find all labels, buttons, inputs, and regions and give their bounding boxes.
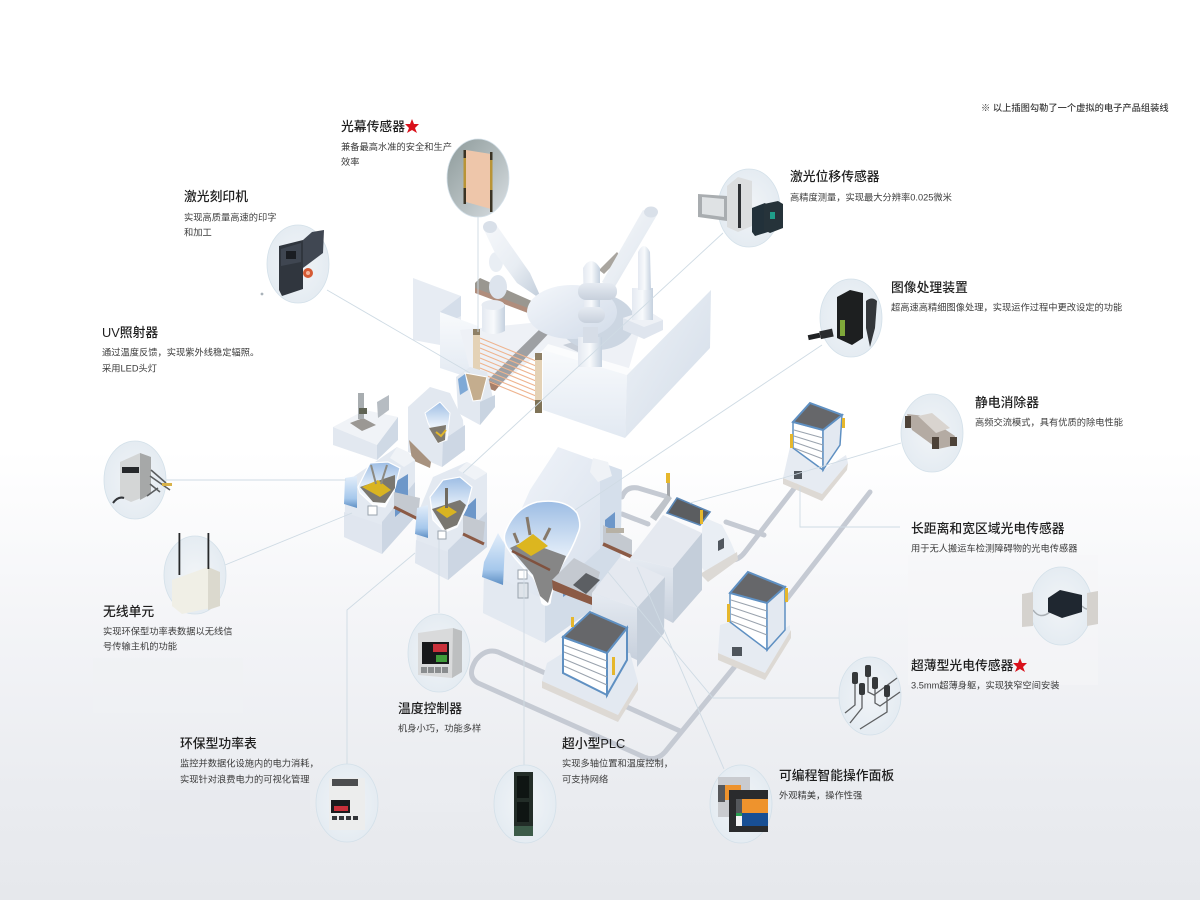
description: 效率: [341, 156, 360, 167]
heading: 静电消除器: [975, 395, 1039, 410]
heading: 可编程智能操作面板: [779, 768, 894, 783]
heading: 超薄型光电传感器: [911, 658, 1014, 673]
product bubble: [1022, 567, 1098, 645]
heading: 温度控制器: [398, 701, 462, 716]
callout: UV irradiator: [102, 325, 259, 519]
conveyors in robot cell: [475, 252, 621, 391]
block front: [592, 557, 665, 667]
product bubble: [267, 225, 329, 303]
heading: 激光位移传感器: [790, 169, 880, 184]
heading: 光幕传感器: [341, 119, 405, 134]
machine 2: [408, 387, 465, 468]
block back: [630, 495, 703, 623]
product bubble: [447, 139, 509, 217]
robot: left: [482, 221, 542, 334]
assembly line illustration: [333, 206, 870, 759]
callout: image processing device: [808, 279, 1122, 357]
heading: 无线单元: [103, 604, 154, 619]
description: 采用LED头灯: [102, 364, 157, 374]
callout: ultra-thin photoelectric sensor: [839, 657, 1060, 735]
heading: 环保型功率表: [180, 736, 257, 751]
callout: eco power meter: [180, 736, 378, 842]
heading: 长距离和宽区域光电传感器: [911, 521, 1065, 536]
product bubble: [408, 614, 470, 692]
product bubble: [104, 441, 172, 519]
light curtain: [473, 329, 542, 413]
heading: 图像处理装置: [891, 280, 968, 295]
description: 实现高质量高速的印字: [184, 212, 276, 222]
AGV front: [542, 612, 638, 722]
description: 和加工: [184, 228, 212, 238]
robot: right: [623, 246, 663, 339]
callout: laser marker: [184, 189, 329, 303]
robot: center: [578, 206, 658, 323]
product bubble: [808, 279, 882, 357]
description: 高频交流模式，具有优质的除电性能: [975, 416, 1123, 428]
leader lines: [166, 217, 901, 769]
callout: static eliminator: [901, 394, 1123, 472]
callout: long range photoelectric sensor: [911, 521, 1098, 645]
description: 高精度测量，实现最大分辨率0.025微米: [790, 192, 952, 202]
product bubble: [494, 765, 556, 843]
description: 实现环保型功率表数据以无线信: [103, 626, 232, 636]
description: 可支持网络: [562, 774, 608, 784]
description: 实现多轴位置和温度控制，: [562, 758, 673, 768]
AGV behind block: [666, 473, 738, 582]
icon: red star: [1013, 658, 1027, 672]
heading: 激光刻印机: [184, 189, 248, 204]
AGV right: [718, 572, 791, 680]
inspection stage: [333, 393, 398, 460]
callout: light curtain sensor: [341, 119, 509, 217]
conveyor between machines 4 and 5: [463, 515, 485, 544]
conveyor between machines 3 and 4: [394, 492, 420, 519]
product bubble: [164, 533, 226, 614]
description: 兼备最高水准的安全和生产: [341, 141, 452, 152]
product bubble: [698, 169, 783, 247]
description: 3.5mm超薄身躯，实现狭窄空间安装: [911, 680, 1060, 690]
callout: programmable display: [710, 765, 894, 843]
AGV tracks: [471, 486, 870, 759]
robot arms: [482, 206, 663, 367]
machine 1: [456, 367, 495, 425]
product bubble: [316, 764, 378, 842]
AGV upper right: [783, 403, 848, 501]
marker dot: [261, 293, 263, 295]
machine 3: [344, 447, 415, 554]
description: 超高速高精细图像处理，实现运作过程中更改设定的功能: [891, 302, 1122, 312]
machine 5 (main): [482, 447, 622, 643]
product bubble: [839, 657, 901, 735]
description: 号传输主机的功能: [103, 640, 177, 652]
icon: red star: [405, 119, 419, 133]
product bubble: [710, 765, 772, 843]
callout: temperature controller: [398, 614, 481, 734]
center turntable: [527, 285, 635, 367]
callout: micro PLC: [494, 736, 673, 843]
callout: wireless unit: [103, 533, 232, 652]
conveyors after machine 5: [552, 525, 632, 605]
description: 外观精美，操作性强: [779, 790, 862, 800]
description: 通过温度反馈，实现紫外线稳定辐照。: [102, 346, 259, 358]
callout: laser displacement sensor: [698, 169, 952, 247]
description: 监控并数据化设施内的电力消耗，: [180, 758, 319, 768]
description: 机身小巧，功能多样: [398, 722, 481, 734]
machine 4: [415, 462, 487, 580]
robot cell walls: [413, 278, 711, 438]
heading: 超小型PLC: [562, 736, 625, 751]
footnote: ※ 以上插图勾勒了一个虚拟的电子产品组装线: [981, 102, 1169, 113]
description: 实现针对浪费电力的可视化管理: [180, 774, 310, 784]
heading: UV照射器: [102, 325, 158, 340]
description: 用于无人搬运车检测障碍物的光电传感器: [911, 542, 1078, 554]
product bubble: [901, 394, 963, 472]
